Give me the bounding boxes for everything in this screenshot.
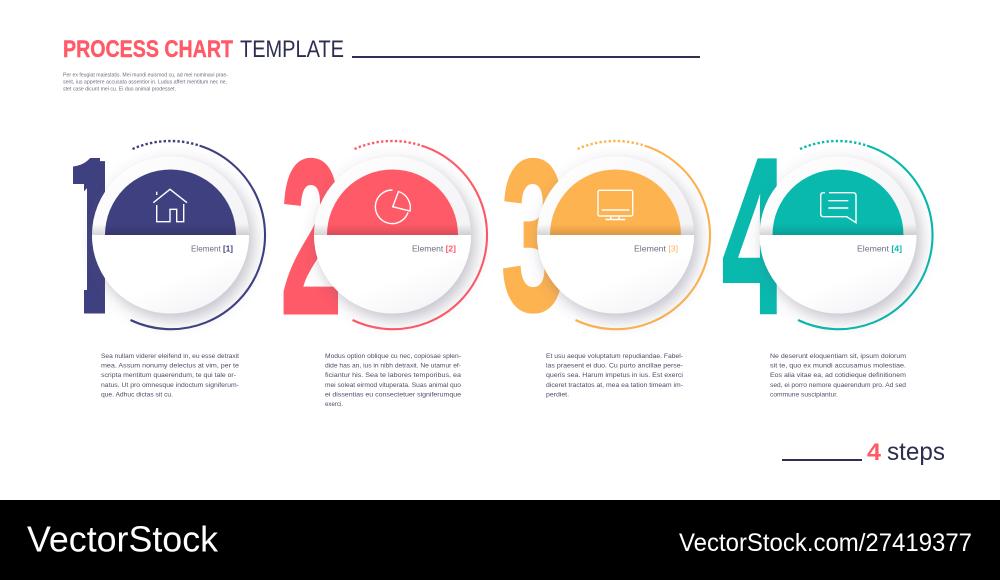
text block 1: scripta mentitum quaerendum, te qui tale or- — [101, 372, 236, 379]
text block 2: ficiantur his. Sea te labores temporibus, ea — [325, 372, 461, 379]
disc 2 — [314, 156, 471, 314]
text block 2: exerci. — [325, 401, 343, 408]
text block 4 — [770, 353, 907, 398]
step 4 — [722, 140, 934, 330]
disc 4 — [760, 156, 916, 314]
text block 4: sit te, quo ex mundi accusamus molestiae. — [770, 363, 906, 370]
header description: stet case dicunt mei cu. Ei duo animal prodesset. — [63, 86, 176, 92]
text block 1: Sea nullam viderer eleifend in, eu esse detraxit — [101, 353, 239, 360]
text block 3: Et usu aeque voluptatum repudiandae. Fabel- — [546, 353, 683, 360]
numeral 3: 3 — [501, 115, 566, 356]
step 2 — [284, 140, 488, 330]
title: TEMPLATE — [240, 36, 344, 63]
steps counter: steps — [887, 438, 945, 466]
text block 3: perdiet. — [546, 391, 569, 398]
text block 2: dide has an, ius in nibh detraxit. Ne utamur ef- — [325, 363, 461, 370]
text block 2: ei dissentias eu consectetuer signiferumque — [325, 391, 461, 398]
label: element 2: Element [2] — [412, 244, 456, 254]
numeral 1: 1 — [56, 113, 131, 360]
header description: sent, ius appetere accusata assentior in. Ludus affert mentitum nec ne, — [63, 79, 227, 85]
text block 1 — [101, 353, 239, 398]
footer band: VectorStock — [27, 518, 219, 560]
text block 4: commune suscipiantur. — [770, 391, 838, 398]
ring 2 — [352, 141, 487, 329]
disc 1 — [92, 156, 249, 314]
ring 4 — [798, 141, 933, 329]
step 1 — [73, 140, 266, 330]
text block 1: que. Adhuc dictas sit cu. — [101, 391, 173, 398]
text block 2 — [325, 353, 461, 408]
header description — [63, 72, 228, 92]
title: PROCESS CHART — [63, 36, 233, 63]
text block 3 — [546, 353, 684, 398]
ring 3 — [576, 141, 710, 329]
disc 3 — [537, 156, 694, 314]
label: element 3: Element [3] — [634, 244, 678, 254]
text block 3: diceret tractatos at, mea ea tation timeam im- — [546, 382, 683, 389]
text block 1: mea. Assum nonumy delectus at vim, per te — [101, 363, 239, 370]
icon: chat bubble — [821, 193, 856, 223]
header description: Per ex feugiat maiestatis. Mei mundi euismod cu, ad mei nominavi prae- — [63, 72, 228, 78]
text block 4: Ne deserunt eloquentiam sit, ipsum dolorum — [770, 353, 907, 360]
steps counter: 4 — [867, 439, 882, 466]
icon: house — [153, 189, 187, 222]
icon: monitor — [598, 190, 633, 220]
text block 4: sed, ei porro nemore quaerendum pro. Ad sed — [770, 382, 906, 389]
text block 2: mei soleat eirmod vituperata. Suas animal quo — [325, 382, 461, 389]
text block 3: las praesent ei duo. Cu purto ancillae perse- — [546, 363, 683, 370]
step 3 — [502, 140, 712, 330]
text block 1: natus. Ut pro omnesque indoctum signiferum- — [101, 382, 239, 389]
text block 4: Eos alia vitae ea, ad cotidieque definitionem — [770, 372, 907, 379]
numeral 1 — [73, 158, 105, 314]
text block 2: Modus option oblique cu nec, copiosae splen- — [325, 353, 461, 360]
ring 1 — [130, 141, 265, 329]
numeral 2: 2 — [280, 114, 342, 360]
steps counter — [782, 438, 945, 466]
text block 3: queris sea. Harum impetus in ius. Est exerci — [546, 372, 684, 379]
icon: pie chart — [375, 190, 410, 224]
numeral 4: 4 — [722, 111, 788, 360]
label: element 4: Element [4] — [857, 244, 902, 254]
label: element 1: Element [1] — [191, 244, 233, 254]
footer band: VectorStock.com/27419377 — [679, 529, 972, 557]
footer band — [0, 500, 1000, 580]
